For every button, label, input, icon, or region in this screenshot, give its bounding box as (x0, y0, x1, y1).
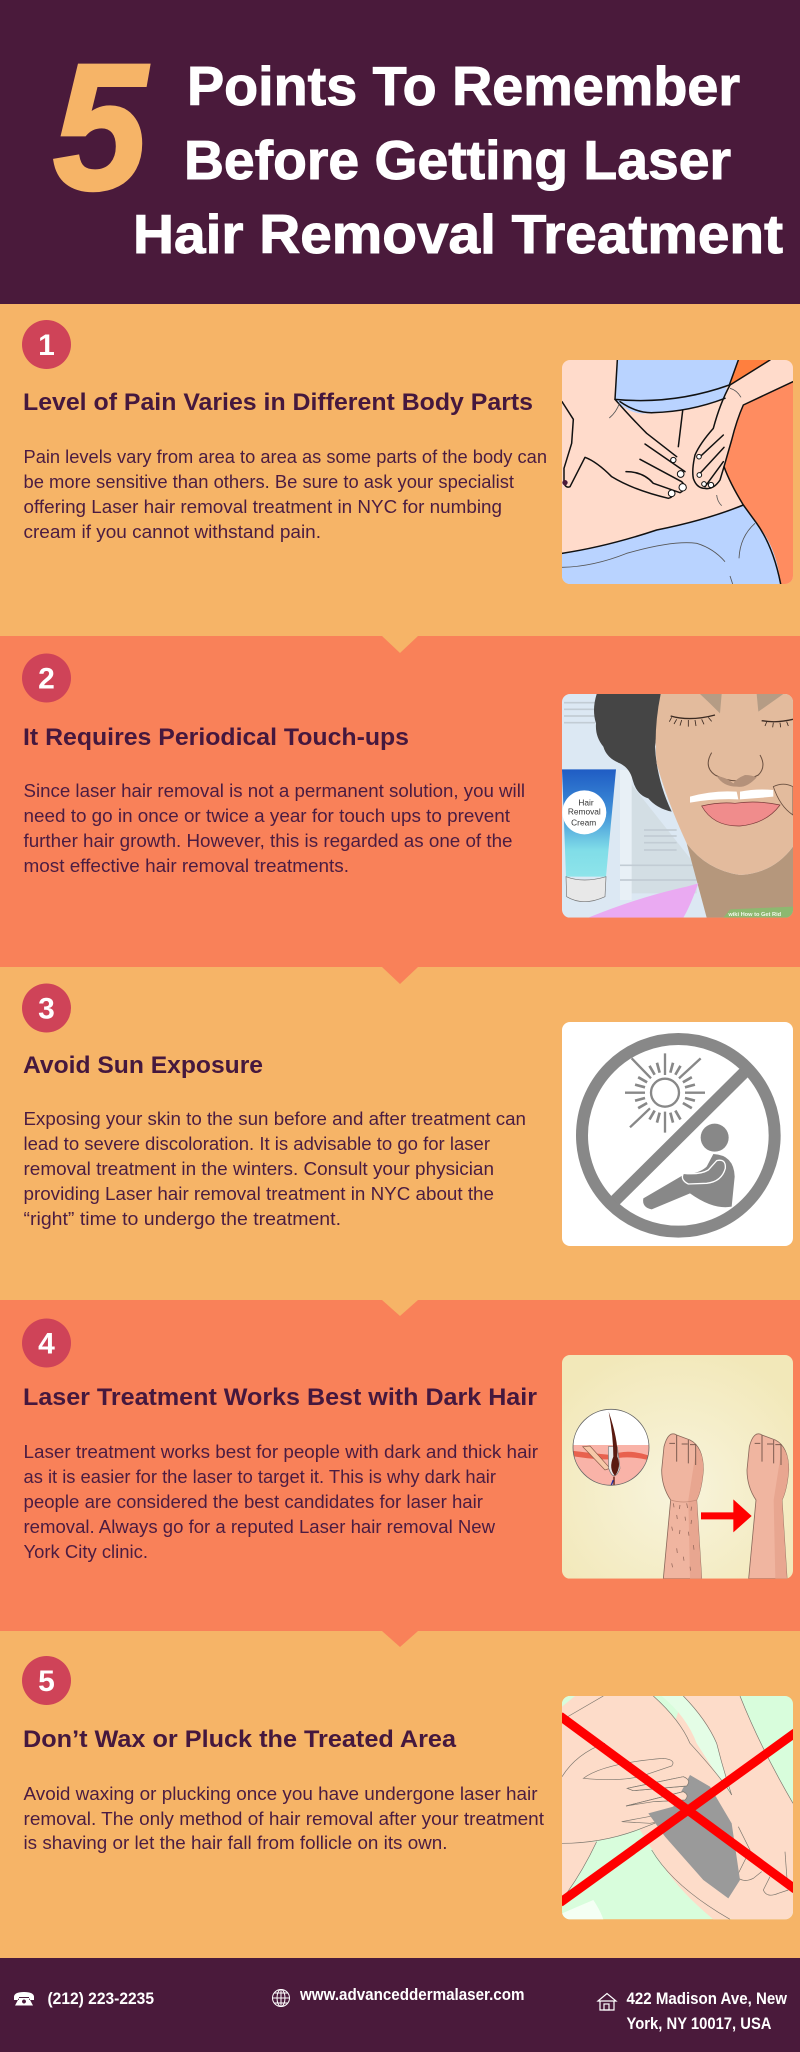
icon: seated child (643, 1124, 735, 1209)
body text: point 3: lead to severe discoloration. It is advisable to go for laser (24, 1133, 490, 1154)
icon: sun (625, 1053, 705, 1133)
heading: point 2: It Requires Periodical Touch-ups (23, 724, 409, 751)
body text: point 5: is shaving or let the hair fall from follicle on its own. (24, 1832, 448, 1853)
arrow: before to after (701, 1499, 752, 1532)
label: cream tube: Removal (568, 806, 601, 816)
title: Hair Removal Treatment (133, 203, 783, 265)
panel: point 1 (0, 304, 800, 636)
body text: point 4: Laser treatment works best for people with dark and thick hair (24, 1441, 538, 1462)
body text: point 4: removal. Always go for a reputed Laser hair removal New (24, 1516, 496, 1537)
icon: house (598, 1994, 616, 2010)
icon: telephone (14, 1992, 34, 2006)
title: Points To Remember (187, 55, 740, 117)
body text: point 3: removal treatment in the winters. Consult your physician (24, 1158, 494, 1179)
body text: point 4: York City clinic. (24, 1541, 148, 1562)
number badge 3: 3 (38, 992, 55, 1026)
icon: arm without hair (747, 1434, 789, 1579)
body text: point 3: providing Laser hair removal treatment in NYC about the (24, 1183, 494, 1204)
icon: globe (272, 1990, 290, 2006)
body text: point 4: as it is easier for the laser to target it. This is why dark hair (24, 1466, 496, 1487)
number badge 4 (22, 1318, 71, 1368)
notch arrow from point 3 (382, 1300, 418, 1316)
body text: point 5 (24, 1783, 544, 1853)
body text: point 1: be more sensitive than others. Be sure to ask your specialist (24, 471, 514, 492)
contact: phone: (212) 223-2235 (48, 1990, 154, 2008)
watermark: wiki How to Get Rid (727, 912, 782, 918)
number badge 2: 2 (38, 662, 55, 696)
number badge 3 (22, 984, 71, 1032)
body text: point 1: Pain levels vary from area to area as some parts of the body can (24, 446, 547, 467)
icon: hair follicle lens (570, 1409, 652, 1488)
number badge 5 (22, 1656, 71, 1705)
body text: point 2: need to go in once or twice a year for touch ups to prevent (24, 805, 510, 826)
title: Before Getting Laser (184, 129, 731, 191)
title (133, 55, 783, 265)
body text: point 4 (24, 1441, 538, 1562)
body text: point 2: further hair growth. However, this is regarded as one of the (24, 830, 512, 851)
big numeral 5: 5 (53, 27, 150, 228)
contact: address: York, NY 10017, USA (626, 2015, 772, 2033)
body text: point 5: Avoid waxing or plucking once you have undergone laser hair (24, 1783, 538, 1804)
body text: point 1: cream if you cannot withstand pain. (24, 521, 321, 542)
image: hairy arm to smooth arm (562, 1355, 793, 1579)
body text: point 5: removal. The only method of hair removal after your treatment (24, 1808, 544, 1829)
contact: address (598, 1990, 787, 2033)
notch arrow from point 2 (382, 967, 418, 984)
label: cream tube (562, 790, 606, 834)
panel: point 3 (0, 967, 800, 1300)
body text: point 2 (24, 780, 525, 876)
label: cream tube: Hair (578, 797, 594, 807)
body text: point 1 (24, 446, 547, 542)
notch arrow from point 1 (382, 636, 418, 653)
number badge 5: 5 (38, 1665, 55, 1698)
image: hair removal cream on upper lip (562, 694, 793, 918)
heading: point 1: Level of Pain Varies in Different Body Parts (23, 389, 533, 416)
footer bar (0, 1958, 800, 2052)
panel: point 2 (0, 636, 800, 967)
icon: arm with hair (662, 1434, 703, 1579)
icon: red cross (560, 1716, 795, 1903)
notch arrow from point 4 (382, 1631, 418, 1647)
body text: point 3: Exposing your skin to the sun before and after treatment can (24, 1108, 526, 1129)
body text: point 2: most effective hair removal treatments. (24, 855, 349, 876)
panel: point 4 (0, 1300, 800, 1631)
heading: point 3: Avoid Sun Exposure (23, 1052, 263, 1079)
label: cream tube: Cream (571, 818, 596, 828)
panel: point 5 (0, 1631, 800, 1958)
body text: point 2: Since laser hair removal is not a permanent solution, you will (24, 780, 525, 801)
heading: point 5: Don’t Wax or Pluck the Treated Area (23, 1726, 457, 1753)
image: hands on lower back (562, 360, 793, 584)
body text: point 4: people are considered the best candidates for laser hair (24, 1491, 483, 1512)
body text: point 3: “right” time to undergo the treatment. (24, 1208, 341, 1229)
body text: point 3 (24, 1108, 526, 1229)
contact: address: 422 Madison Ave, New (626, 1990, 787, 2008)
number badge 2 (22, 654, 71, 702)
body text: point 1: offering Laser hair removal treatment in NYC for numbing (24, 496, 502, 517)
number badge 1 (22, 320, 71, 369)
image: crossed-out waxing (560, 1696, 795, 1919)
image: no sun exposure sign (562, 1022, 793, 1246)
header banner (0, 0, 800, 304)
number badge 4: 4 (38, 1328, 55, 1360)
number badge 1: 1 (38, 329, 55, 362)
contact: website: www.advanceddermalaser.com (299, 1986, 524, 2004)
heading: point 4: Laser Treatment Works Best with Dark Hair (23, 1384, 537, 1411)
